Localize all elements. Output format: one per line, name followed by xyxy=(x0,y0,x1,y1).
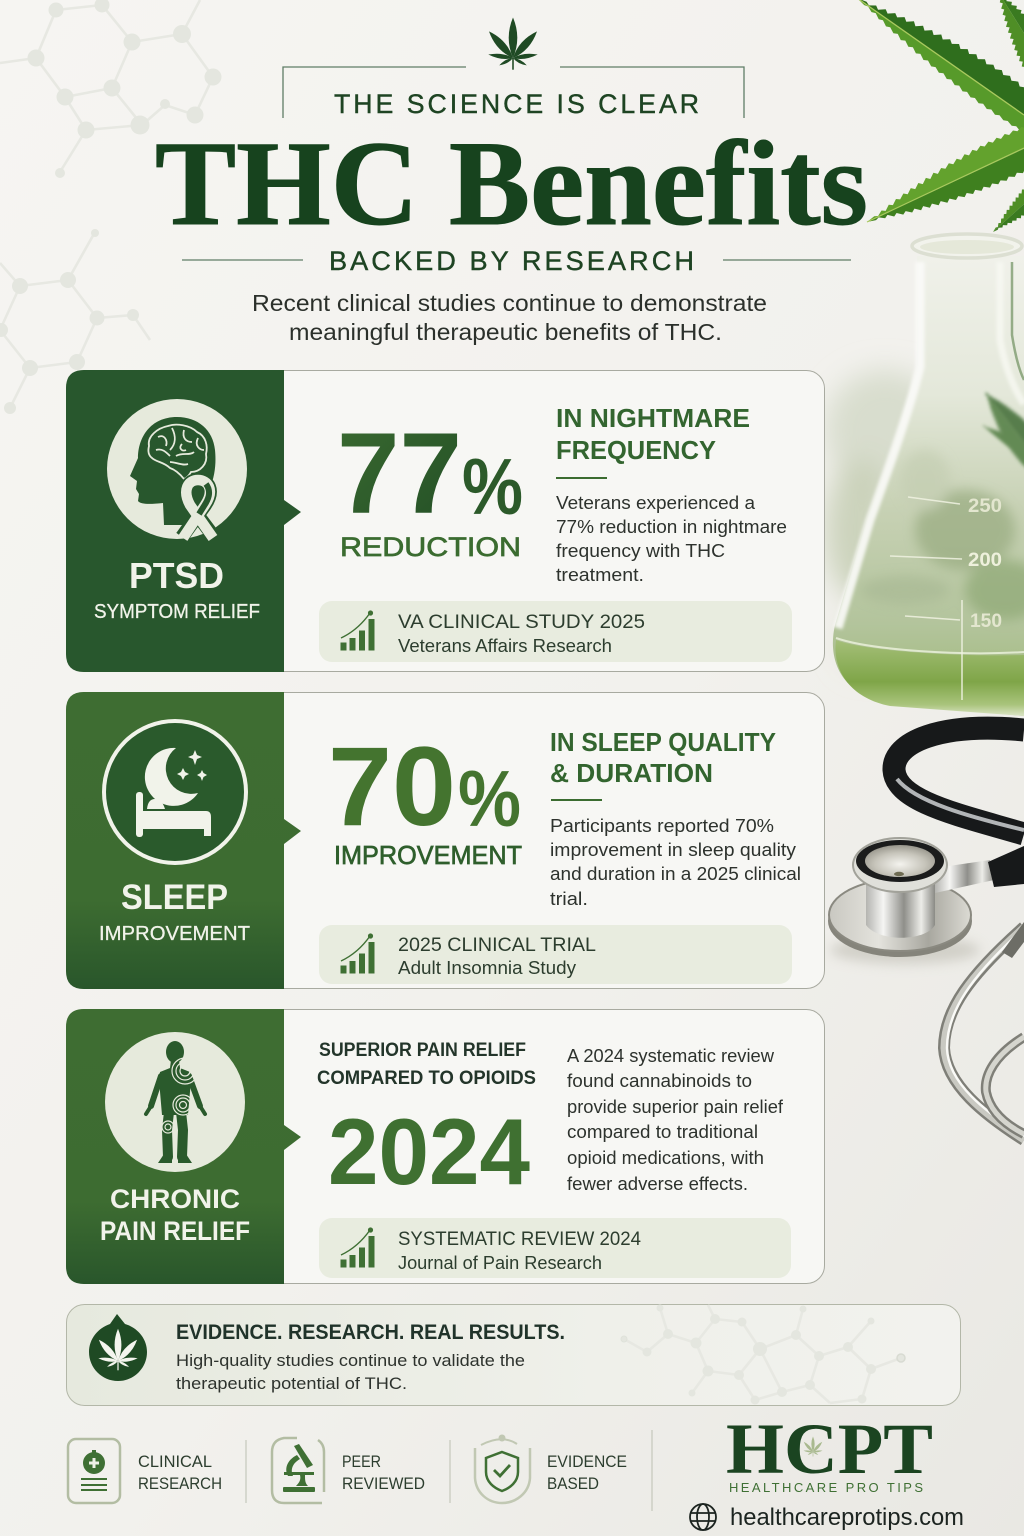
badge: clinical research: CLINICAL xyxy=(138,1453,212,1471)
stat: 77% reduction xyxy=(337,410,523,562)
source: systematic review 2024: Journal of Pain Research xyxy=(398,1253,602,1273)
source: systematic review 2024 xyxy=(319,1218,791,1278)
finding: systematic review text: opioid medications, with xyxy=(567,1148,764,1168)
finding: sleep quality and duration: trial. xyxy=(550,889,588,909)
logo: HCPT: HCPT xyxy=(726,1409,933,1489)
category block: sleep xyxy=(66,692,301,989)
stat: 70% improvement: 70 xyxy=(328,724,456,849)
badge: clinical research: RESEARCH xyxy=(138,1475,222,1493)
banner molecule pattern xyxy=(621,1304,905,1404)
intro text: Recent clinical studies continue to demonstrate xyxy=(252,290,767,316)
source: 2025 clinical trial xyxy=(319,925,792,984)
badge: evidence based: BASED xyxy=(547,1475,599,1493)
photo: glass flask: 200 xyxy=(968,550,1002,571)
finding: nightmare frequency: treatment. xyxy=(556,565,644,585)
photo: stethoscope xyxy=(828,728,1024,1140)
header leaf icon xyxy=(486,17,540,70)
logo: HCPT: HEALTHCARE PRO TIPS xyxy=(729,1480,923,1495)
finding: systematic review text xyxy=(567,1046,784,1194)
finding: systematic review text: compared to traditional xyxy=(567,1122,758,1142)
source: 2025 clinical trial: 2025 CLINICAL TRIAL xyxy=(398,934,596,956)
finding: sleep quality and duration: improvement in sleep quality xyxy=(550,840,796,860)
badge: clinical research xyxy=(68,1439,222,1503)
intro text: meaningful therapeutic benefits of THC. xyxy=(289,319,722,345)
finding: sleep quality and duration: Participants reported 70% xyxy=(550,816,774,836)
badge: peer reviewed xyxy=(272,1438,425,1503)
badge: peer reviewed: PEER xyxy=(342,1453,381,1471)
stat: 77% reduction: REDUCTION xyxy=(340,532,521,562)
finding: sleep quality and duration: & DURATION xyxy=(550,758,713,788)
source: systematic review 2024: SYSTEMATIC REVIEW 2024 xyxy=(398,1228,641,1250)
stat: superior pain relief 2024: COMPARED TO OPIOIDS xyxy=(317,1068,536,1089)
panel: PTSD symptom relief xyxy=(66,370,824,672)
stat: 70% improvement: % xyxy=(458,754,521,843)
photo: glass flask: 150 xyxy=(970,611,1002,632)
intro text xyxy=(252,290,767,345)
badge: peer reviewed: REVIEWED xyxy=(342,1475,425,1493)
photo: cannabis leaves top right xyxy=(848,0,1024,243)
stat: superior pain relief 2024 xyxy=(317,1040,536,1204)
badge: evidence based xyxy=(475,1434,627,1503)
subtitle with rules: BACKED BY RESEARCH xyxy=(329,246,697,276)
finding: nightmare frequency: FREQUENCY xyxy=(556,435,716,465)
background molecule pattern: top left xyxy=(0,0,222,178)
stat: 70% improvement: IMPROVEMENT xyxy=(334,840,522,870)
source: VA clinical study: VA CLINICAL STUDY 2025 xyxy=(398,611,645,633)
category block: PTSD xyxy=(66,370,301,672)
finding: sleep quality and duration xyxy=(550,727,801,909)
panel: chronic pain relief xyxy=(66,1009,824,1284)
category block: PTSD: PTSD xyxy=(129,555,224,596)
category block: PTSD: SYMPTOM RELIEF xyxy=(94,601,260,623)
banner: evidence research real results xyxy=(66,1304,960,1406)
website link: healthcareprotips.com xyxy=(730,1504,964,1531)
finding: nightmare frequency: frequency with THC xyxy=(556,541,725,561)
finding: nightmare frequency: 77% reduction in nightmare xyxy=(556,517,787,537)
badge: evidence based: EVIDENCE xyxy=(547,1453,627,1471)
icon: moon and bed xyxy=(104,721,246,863)
main title: THC Benefits xyxy=(155,117,868,251)
category block: chronic pain: PAIN RELIEF xyxy=(100,1216,250,1246)
stat: superior pain relief 2024: SUPERIOR PAIN RELIEF xyxy=(319,1040,526,1061)
stat: 77% reduction: % xyxy=(462,442,523,531)
finding: systematic review text: fewer adverse effects. xyxy=(567,1174,748,1194)
finding: sleep quality and duration: IN SLEEP QUALITY xyxy=(550,727,776,757)
photo: glass flask xyxy=(833,234,1024,716)
photo: glass flask: 250 xyxy=(968,496,1002,517)
source: VA clinical study xyxy=(319,601,792,662)
banner: evidence research real results: therapeutic potential of THC. xyxy=(176,1374,407,1393)
icon: leaf drop xyxy=(89,1314,147,1381)
background molecule pattern: left middle xyxy=(0,229,150,414)
category block: sleep: IMPROVEMENT xyxy=(99,923,250,945)
banner: evidence research real results: EVIDENCE. RESEARCH. REAL RESULTS. xyxy=(176,1321,565,1344)
finding: nightmare frequency xyxy=(556,403,787,585)
icon: human body with pain points xyxy=(105,1032,245,1172)
finding: systematic review text: provide superior pain relief xyxy=(567,1097,784,1117)
finding: nightmare frequency: IN NIGHTMARE xyxy=(556,403,750,433)
finding: sleep quality and duration: and duration in a 2025 clinical xyxy=(550,864,801,884)
stat: 77% reduction: 77 xyxy=(337,410,462,538)
banner: evidence research real results: High-quality studies continue to validate the xyxy=(176,1351,525,1370)
category block: chronic pain: CHRONIC xyxy=(110,1184,240,1214)
source: 2025 clinical trial: Adult Insomnia Study xyxy=(398,958,576,978)
stat: superior pain relief 2024: 2024 xyxy=(328,1099,530,1204)
photo: blurred green background behind flask xyxy=(825,370,945,670)
header frame lines xyxy=(283,67,744,118)
stat: 70% improvement xyxy=(328,724,522,870)
source: VA clinical study: Veterans Affairs Research xyxy=(398,636,612,656)
finding: nightmare frequency: Veterans experienced a xyxy=(556,493,756,513)
icon: head with brain and ribbon xyxy=(107,399,247,539)
finding: systematic review text: found cannabinoids to xyxy=(567,1071,752,1091)
panel: sleep improvement xyxy=(66,692,824,989)
eyebrow heading: THE SCIENCE IS CLEAR xyxy=(334,89,702,119)
category block: chronic pain xyxy=(66,1009,301,1284)
finding: systematic review text: A 2024 systematic review xyxy=(567,1046,775,1066)
category block: sleep: SLEEP xyxy=(121,878,228,917)
